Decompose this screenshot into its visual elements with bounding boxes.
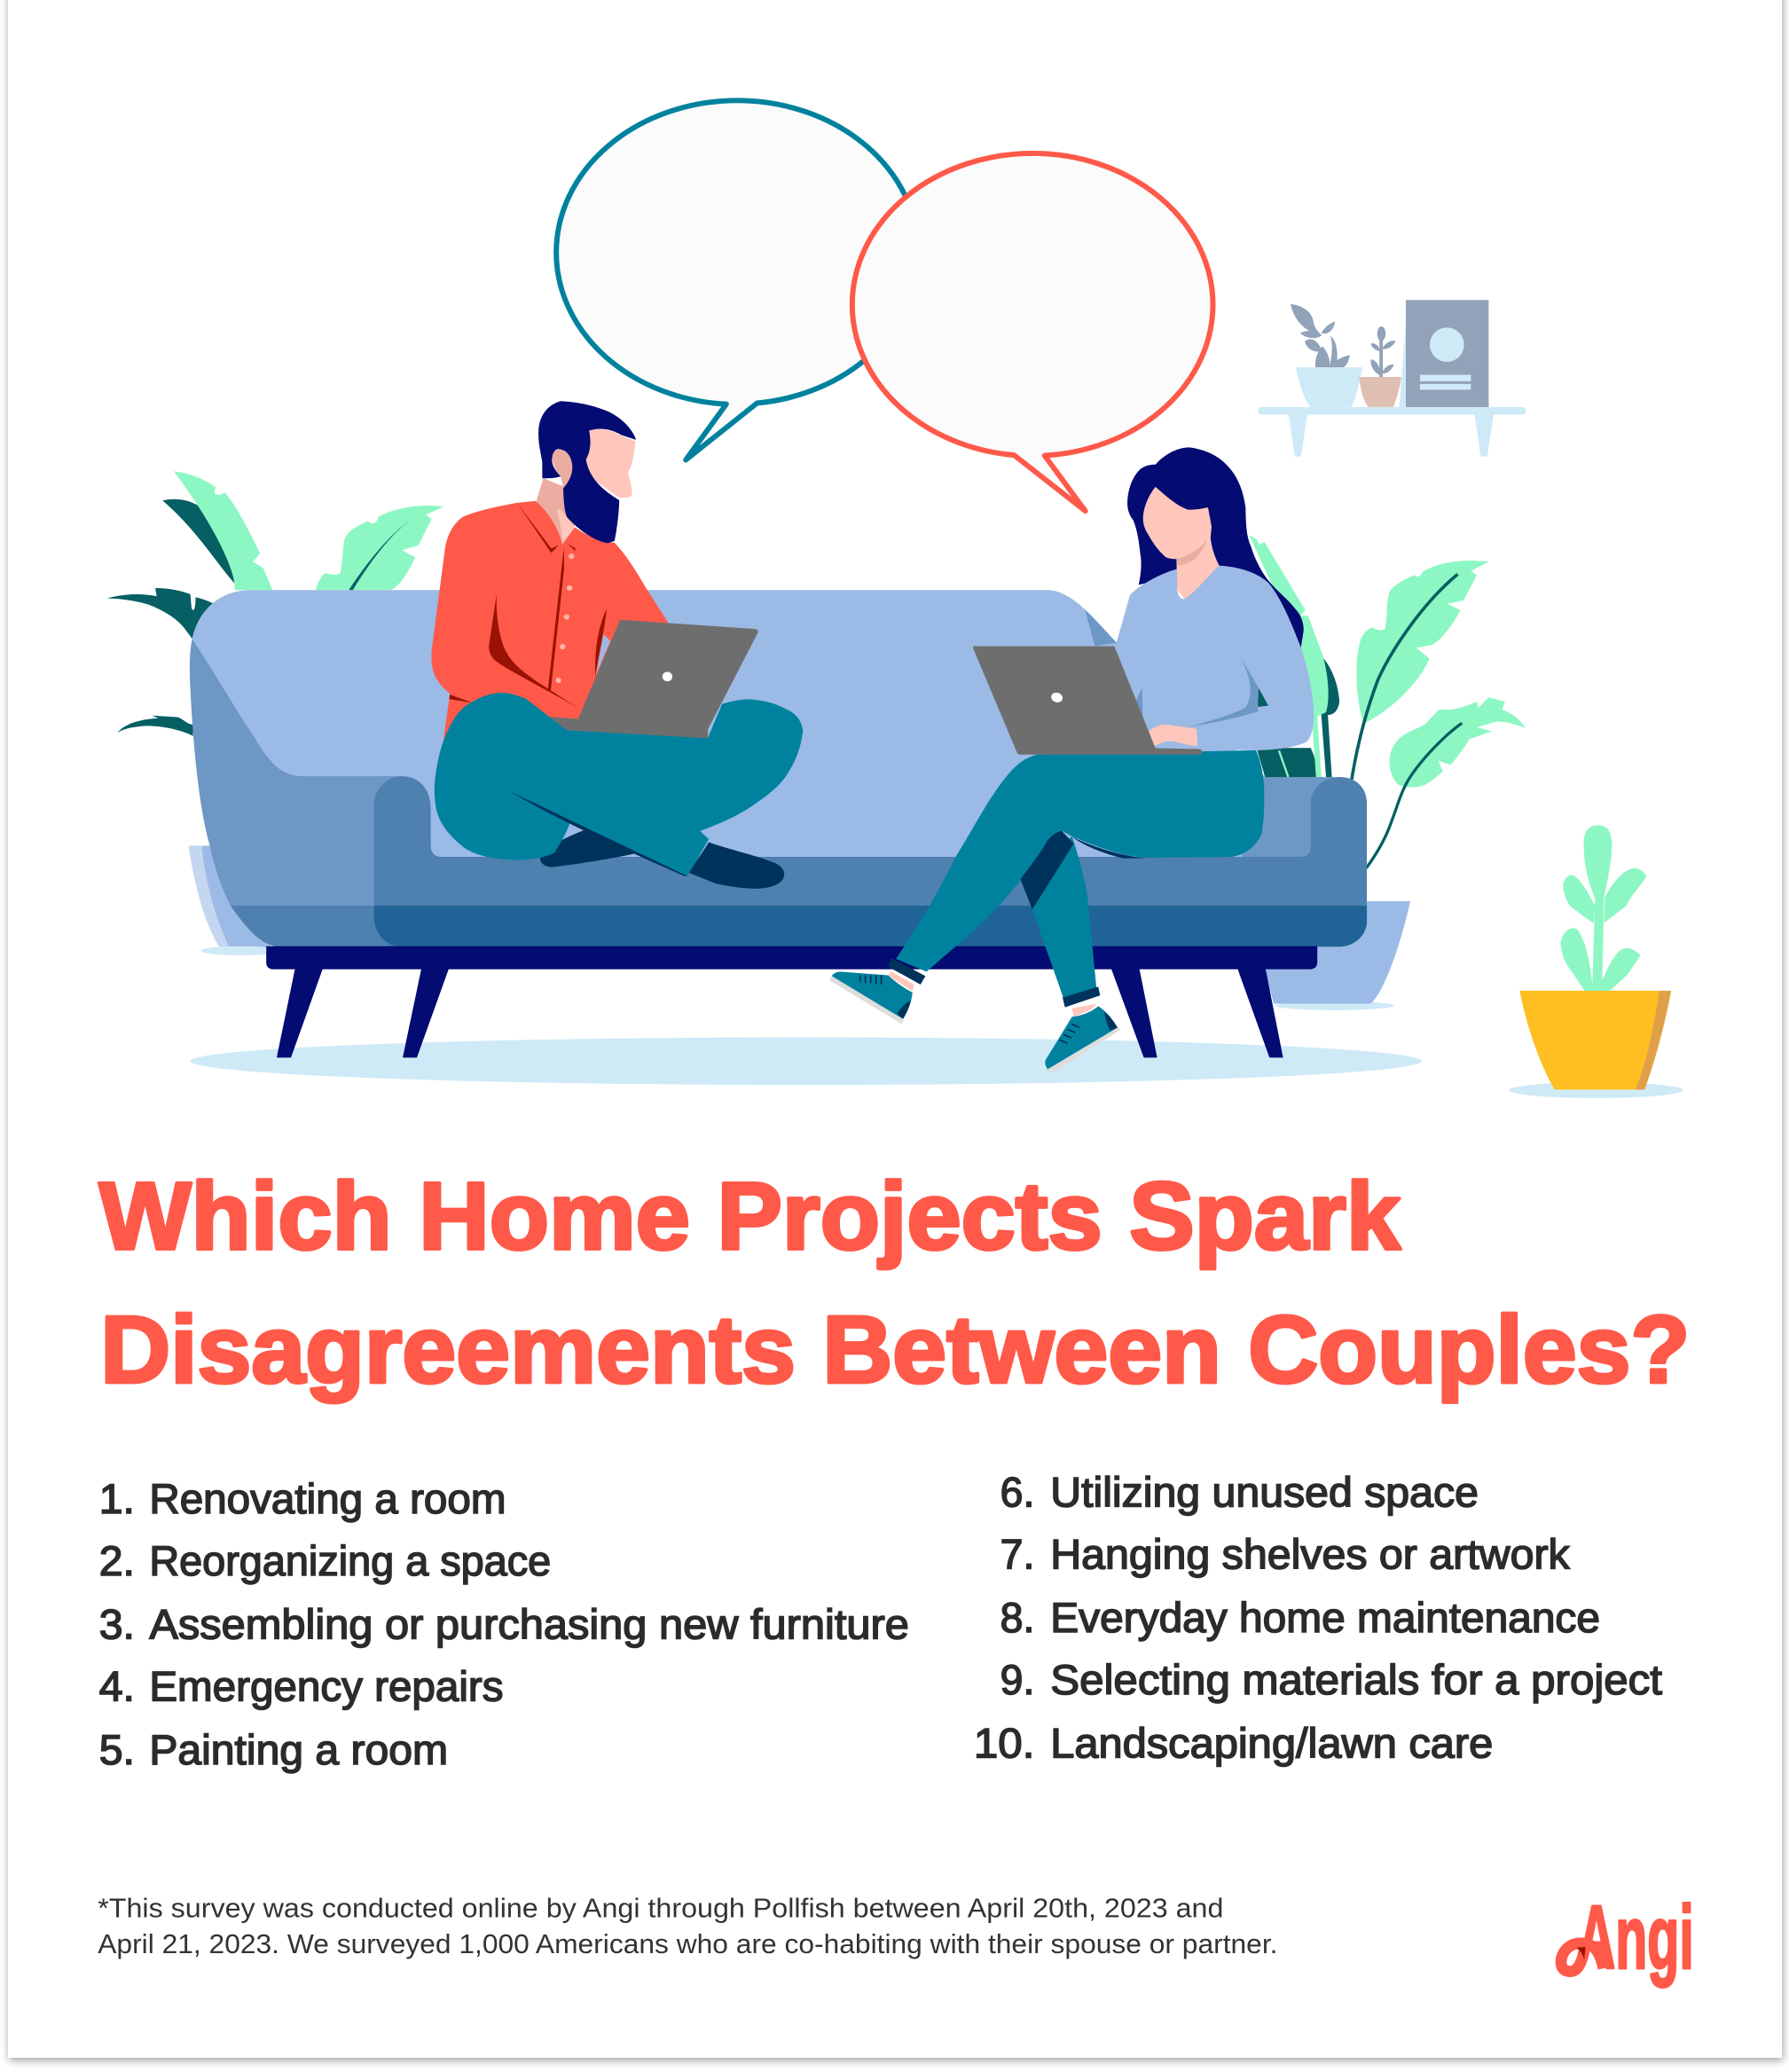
big mint leaf xyxy=(1356,561,1488,723)
man laptop xyxy=(549,620,758,738)
left lower band xyxy=(231,906,400,946)
plant: right behind woman xyxy=(1249,535,1526,868)
list: projects 1 to 5 xyxy=(99,1476,909,1773)
logo overlap xyxy=(1576,1947,1586,1959)
survey footnote: *This survey was conducted online by Angi through Pollfish between April 20th, 2023 and xyxy=(98,1894,1223,1924)
list: projects 6 to 10: Utilizing unused space xyxy=(1050,1469,1479,1515)
ear xyxy=(552,450,573,489)
shirt fold right xyxy=(595,608,607,677)
mint midrib xyxy=(1279,750,1288,777)
list: projects 1 to 5: 5. xyxy=(99,1727,135,1773)
man trousers xyxy=(435,693,803,876)
left arm xyxy=(190,639,400,946)
back lower leg xyxy=(1021,836,1096,998)
big leaf stem xyxy=(1352,574,1457,780)
sofa xyxy=(190,590,1367,1057)
seat front and arm fronts xyxy=(374,776,1367,946)
logo loop xyxy=(1561,1943,1604,1972)
dark leaf middle xyxy=(107,588,214,640)
small potted plant on the floor xyxy=(1509,825,1683,1098)
right arm inner xyxy=(1242,777,1335,859)
sofa back xyxy=(192,590,1268,858)
illustration: couple on sofa xyxy=(107,100,1683,1098)
list: projects 1 to 5: Emergency repairs xyxy=(149,1663,504,1709)
sweater arm gap xyxy=(1256,688,1268,707)
trouser shadow line xyxy=(509,791,687,876)
thighs and front leg xyxy=(896,750,1264,971)
list: projects 6 to 10: Selecting materials for a project xyxy=(1050,1657,1662,1703)
speech bubble: red xyxy=(852,153,1213,511)
title: Disagreements Between Couples? xyxy=(100,1296,1690,1402)
back shade near woman xyxy=(1085,609,1117,646)
list: projects 6 to 10: 8. xyxy=(1000,1595,1034,1641)
shirt placket xyxy=(548,547,564,692)
man with laptop xyxy=(431,401,803,889)
list: projects 6 to 10: Everyday home maintenance xyxy=(1050,1595,1600,1641)
front shoe xyxy=(829,971,913,1024)
shirt fold left xyxy=(489,593,581,710)
hair and beard xyxy=(538,401,636,543)
thigh shadow xyxy=(1071,836,1146,859)
Angi logo xyxy=(1561,1888,1694,1988)
logo arch opening xyxy=(1570,1946,1598,1972)
woman laptop xyxy=(973,647,1202,755)
speech bubble: teal xyxy=(556,100,918,460)
face xyxy=(586,429,636,498)
hand xyxy=(1150,725,1197,747)
list: projects 1 to 5: 4. xyxy=(99,1663,135,1709)
list: projects 6 to 10: Landscaping/lawn care xyxy=(1050,1720,1493,1766)
list: projects 1 to 5: Painting a room xyxy=(149,1727,448,1773)
collar xyxy=(517,503,576,553)
mint leaf tall xyxy=(174,471,272,590)
list: projects 1 to 5: 3. xyxy=(99,1601,135,1647)
sofa legs xyxy=(277,969,1283,1057)
pot side xyxy=(1636,991,1671,1089)
man shoes xyxy=(540,829,784,889)
lower mint leaf xyxy=(1390,697,1526,787)
buttons xyxy=(556,553,574,683)
list: projects 6 to 10: 10. xyxy=(974,1720,1034,1766)
floor shadow xyxy=(191,1037,1422,1085)
cuffs xyxy=(888,958,1100,1008)
small plant in pink pot xyxy=(1359,326,1401,407)
lower leaf stem xyxy=(1366,723,1462,868)
mint leaf right xyxy=(316,506,443,590)
list: projects 6 to 10: 7. xyxy=(1000,1531,1034,1577)
plant xyxy=(1560,825,1646,991)
potted plant in bowl xyxy=(1291,304,1362,407)
mint back leaf xyxy=(1249,535,1329,777)
pot shadow xyxy=(1509,1082,1683,1098)
framed picture xyxy=(1400,300,1488,407)
survey footnote xyxy=(98,1894,1278,1959)
neck xyxy=(537,478,575,545)
list: projects 6 to 10: 9. xyxy=(1000,1657,1034,1703)
list: projects 1 to 5: 1. xyxy=(99,1476,135,1522)
list: projects 6 to 10: 6. xyxy=(1000,1469,1034,1515)
knee shadow xyxy=(1020,831,1074,909)
sweater fold xyxy=(1189,654,1259,726)
pot: left behind sofa xyxy=(189,845,280,955)
list: projects 1 to 5: Renovating a room xyxy=(149,1476,506,1522)
face and neck xyxy=(1143,487,1220,599)
darkest lower band xyxy=(374,906,1367,946)
pink pot xyxy=(1359,377,1401,407)
plant: left behind sofa xyxy=(107,471,443,736)
pot xyxy=(1519,991,1671,1089)
wall shelf with decor xyxy=(1258,300,1526,457)
pot: right behind sofa xyxy=(1265,901,1410,1010)
laptop logo xyxy=(1050,691,1064,704)
list: projects 1 to 5: Reorganizing a space xyxy=(149,1538,551,1584)
neck shade xyxy=(1176,539,1207,566)
sweater xyxy=(1116,566,1314,750)
dark leaf lower xyxy=(118,716,193,736)
mint leaf vein xyxy=(349,519,412,590)
logo wordmark: Angi xyxy=(1578,1888,1694,1988)
sweater fold by laptop xyxy=(1136,688,1143,720)
dark leaf upper xyxy=(162,499,235,585)
title xyxy=(99,1163,1690,1402)
hair xyxy=(1127,447,1304,654)
survey footnote: April 21, 2023. We surveyed 1,000 Americans who are co-habiting with their spouse or partner. xyxy=(98,1929,1278,1959)
list: projects 6 to 10: Hanging shelves or artwork xyxy=(1050,1531,1570,1577)
shirt xyxy=(431,501,669,751)
woman with laptop xyxy=(829,447,1314,1074)
title: Which Home Projects Spark xyxy=(99,1163,1401,1269)
bowl xyxy=(1296,367,1362,407)
back shoe xyxy=(1045,1006,1120,1074)
back leaf and stem dark xyxy=(1322,655,1339,777)
list: projects 6 to 10 xyxy=(974,1469,1662,1766)
arm gap xyxy=(596,634,610,675)
neck highlight xyxy=(557,509,575,545)
ankles xyxy=(888,971,1096,1016)
hem xyxy=(449,695,473,703)
list: projects 1 to 5: 2. xyxy=(99,1538,135,1584)
sofa base xyxy=(266,946,1317,969)
shelf board xyxy=(1258,407,1526,457)
laptop logo xyxy=(663,671,672,681)
list: projects 1 to 5: Assembling or purchasing new furniture xyxy=(149,1601,909,1647)
